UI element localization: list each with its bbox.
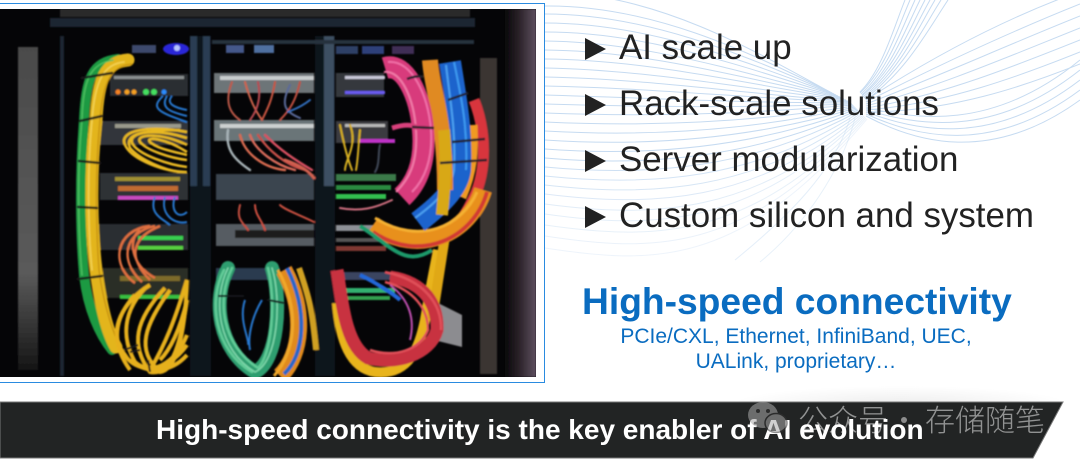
bullet arrow 4	[585, 206, 606, 228]
rack units: left column	[98, 74, 188, 299]
cables: blue jumpers	[153, 96, 262, 350]
bullet: Server modularization: Server modularization	[619, 140, 958, 179]
rack units: center column	[214, 73, 314, 280]
cables: lower left yellow bundle	[117, 280, 187, 372]
cables: left yellow loop	[124, 129, 187, 172]
cables: right lower yellow and red loop	[337, 230, 446, 372]
cables: lower center orange and blue	[274, 268, 316, 376]
watermark text: account label: 公众号	[798, 396, 888, 440]
bullet list	[585, 28, 1034, 235]
bottom banner	[0, 394, 1064, 458]
heading: high-speed connectivity: High-speed connectivity	[582, 280, 1012, 322]
bullet: Rack-scale solutions: Rack-scale solutions	[619, 84, 939, 123]
watermark text: separator dot	[901, 417, 907, 423]
photo frame	[0, 3, 545, 383]
protocol list line 2: UALink, proprietary…	[696, 350, 896, 373]
cables: center panel wiring	[227, 82, 392, 230]
cables: orange loop	[119, 226, 160, 283]
rack units: right column	[336, 73, 462, 347]
bullet arrow 3	[585, 150, 606, 172]
bullet: AI scale up: AI scale up	[619, 28, 792, 67]
bullet arrow 2	[585, 94, 606, 116]
cables: green loop	[216, 268, 284, 372]
watermark text: account name: 存储随笔	[925, 396, 1045, 440]
bullet arrow 1	[585, 38, 606, 60]
banner text: High-speed connectivity is the key enabler of AI evolution	[156, 414, 924, 445]
photo: server rack with colored cables	[0, 9, 536, 377]
cables: right pink, orange, blue and red bundles	[360, 60, 487, 257]
protocol list line 1: PCIe/CXL, Ethernet, InfiniBand, UEC,	[620, 325, 972, 348]
bullet: Custom silicon and system: Custom silicon and system	[619, 196, 1034, 235]
watermark icon	[748, 402, 788, 434]
cables: green and yellow main bundle	[78, 59, 132, 350]
